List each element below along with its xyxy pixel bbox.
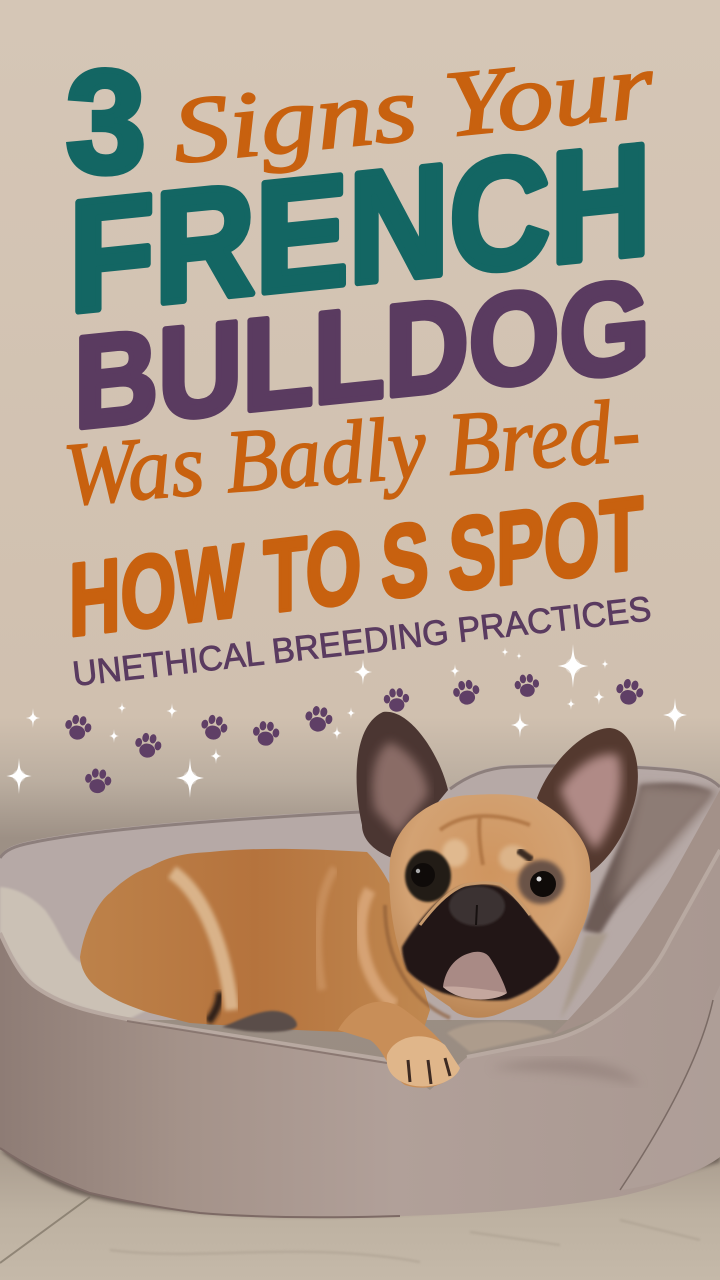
haunch shadow xyxy=(208,992,220,1022)
fluffy rug xyxy=(447,1022,553,1052)
front paw xyxy=(387,1036,460,1086)
dog body xyxy=(80,849,430,1040)
paw prints xyxy=(63,673,645,795)
title script: Signs Your: Signs Your xyxy=(168,33,658,184)
brow bumps xyxy=(442,839,468,867)
muzzle folds xyxy=(420,883,530,925)
fleece lining xyxy=(0,887,147,1020)
right ear xyxy=(537,728,638,873)
left ear xyxy=(357,712,448,858)
bed rim piping xyxy=(0,766,720,858)
title: FRENCH: FRENCH xyxy=(69,110,651,346)
title xyxy=(60,33,658,694)
right end panel xyxy=(620,985,720,1190)
front leg xyxy=(338,1002,457,1088)
haunch highlight xyxy=(172,872,232,1010)
fabric scrap xyxy=(222,1011,297,1032)
nose xyxy=(449,886,505,926)
neck crease xyxy=(385,905,450,1018)
bed inner dark shade xyxy=(583,783,712,935)
title number 3: 3 xyxy=(66,40,146,203)
left eye patch xyxy=(405,850,451,902)
left eye xyxy=(411,863,435,887)
bed piping xyxy=(0,850,720,1060)
bed front xyxy=(0,850,720,1217)
bed back wall xyxy=(0,764,720,1020)
lip xyxy=(443,952,507,998)
forehead wrinkles xyxy=(440,815,530,865)
sparkles xyxy=(6,644,687,798)
right ear inner xyxy=(560,754,621,850)
french bulldog xyxy=(80,712,638,1088)
shading on bed front xyxy=(490,1059,640,1085)
neck fold xyxy=(361,890,395,1005)
head xyxy=(389,794,591,1018)
muzzle xyxy=(402,884,560,1001)
left ear inner xyxy=(372,742,428,835)
title: BULLDOG: BULLDOG xyxy=(74,252,650,456)
title script: Was Badly Bred: Was Badly Bred- xyxy=(60,381,644,525)
side flap xyxy=(553,790,720,1035)
right eye xyxy=(530,871,556,897)
subtitle: UNETHICAL BREEDING PRACTICES xyxy=(70,589,653,694)
right eye patch xyxy=(518,860,564,904)
bed right seam xyxy=(620,1000,713,1190)
dog bed xyxy=(0,764,720,1217)
floor xyxy=(0,1150,720,1280)
